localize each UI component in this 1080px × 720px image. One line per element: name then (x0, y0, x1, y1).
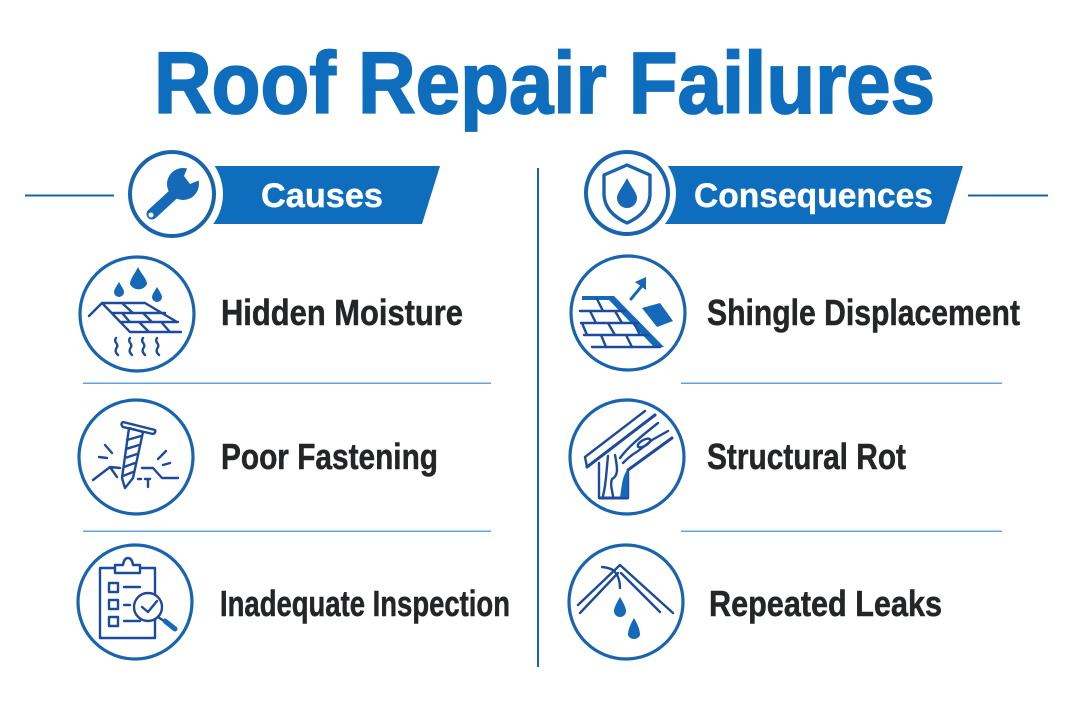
icon: shield with drop (604, 165, 650, 223)
title: Roof Repair Failures (154, 35, 935, 132)
panel: consequences (569, 144, 1048, 659)
item: shingle displacement (571, 256, 1020, 370)
icon: rotted rafter (585, 411, 672, 498)
item: hidden moisture (80, 257, 463, 371)
causes header: Causes (261, 177, 383, 215)
item: inadequate inspection (78, 545, 510, 659)
item: structural rot (570, 400, 906, 514)
icon: nail (93, 422, 178, 488)
causes header (25, 143, 440, 245)
consequences header: Consequences (694, 177, 933, 215)
item: poor fastening (79, 400, 438, 514)
label: Repeated Leaks (709, 583, 942, 624)
icon: leaking roof (578, 565, 673, 639)
icon: displaced shingle (580, 277, 673, 348)
icon: wrench (148, 164, 202, 218)
item: repeated leaks (569, 545, 942, 659)
icon: clipboard and magnifier (100, 558, 175, 638)
label: Poor Fastening (221, 436, 438, 477)
label: Structural Rot (707, 436, 906, 477)
consequences header (578, 144, 1048, 242)
label: Inadequate Inspection (220, 583, 510, 624)
panel: causes (25, 143, 510, 659)
label: Hidden Moisture (221, 292, 463, 333)
icon: roof with moisture (89, 267, 181, 355)
label: Shingle Displacement (707, 292, 1020, 333)
